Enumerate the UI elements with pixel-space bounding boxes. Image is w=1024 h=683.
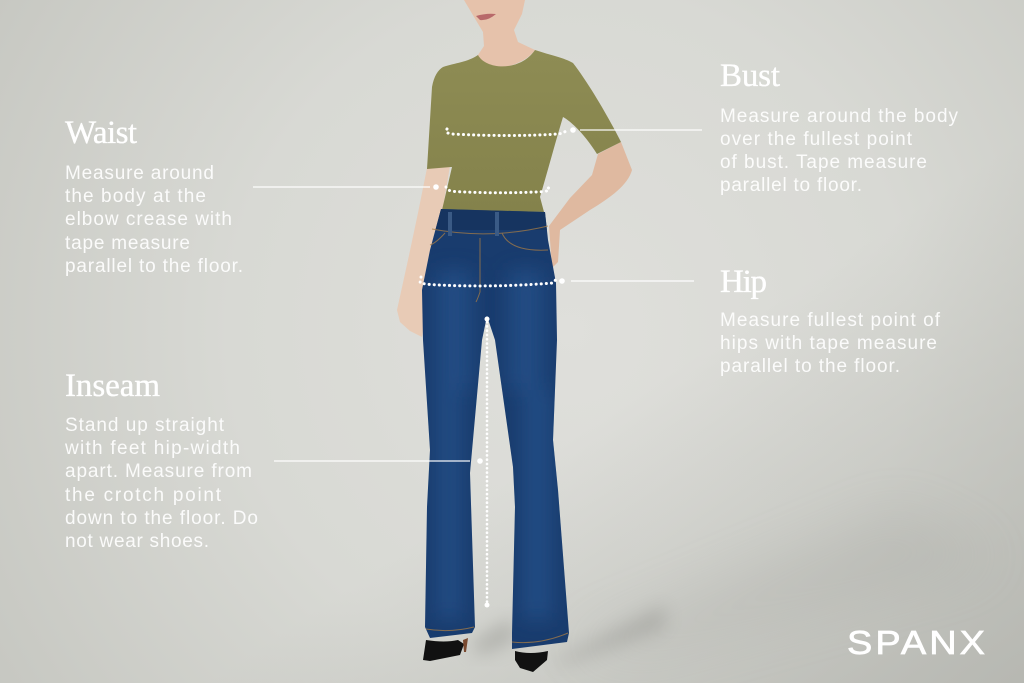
inseam text: Stand up straight: [65, 415, 225, 436]
left shoe: [423, 640, 464, 661]
hip text: Measure fullest point of: [720, 310, 941, 331]
left arm: [397, 166, 450, 337]
waist heading: Waist: [65, 115, 137, 151]
bust heading: Bust: [720, 58, 780, 94]
jeans: [422, 209, 569, 649]
jeans highlights: [436, 270, 552, 620]
lips: [476, 14, 496, 20]
model figure: [397, 0, 632, 672]
right shoe: [515, 651, 548, 672]
waist text: parallel to the floor.: [65, 256, 243, 277]
right arm and hand: [549, 142, 632, 268]
SPANX logo: SPANX: [847, 624, 985, 661]
callout lines: [253, 130, 702, 461]
bust text: over the fullest point: [720, 129, 913, 150]
floor shadows: [470, 510, 1000, 665]
bust text: [720, 106, 958, 196]
waist text: Measure around: [65, 163, 214, 184]
bust text: Measure around the body: [720, 106, 958, 127]
inseam block: [64, 368, 258, 552]
bust text: parallel to floor.: [720, 175, 862, 196]
shirt: [427, 50, 621, 212]
waist text: elbow crease with: [65, 209, 232, 230]
inseam text: not wear shoes.: [65, 531, 209, 552]
hip block: [720, 264, 941, 377]
bust text: of bust. Tape measure: [720, 152, 927, 173]
hip text: parallel to the floor.: [720, 356, 900, 377]
inseam text: the crotch point: [65, 485, 222, 506]
bust measuring dots: [446, 128, 568, 136]
skin: face and neck: [464, 0, 535, 68]
inseam text: with feet hip-width: [64, 438, 240, 459]
jeans belt loops: [448, 212, 499, 236]
waist measuring dots: [446, 187, 549, 193]
inseam text: down to the floor. Do: [65, 508, 258, 529]
heel: [463, 638, 468, 652]
inseam text: apart. Measure from: [65, 461, 252, 482]
hip heading: Hip: [720, 264, 767, 300]
inseam heading: Inseam: [65, 368, 160, 404]
hip text: hips with tape measure: [720, 333, 937, 354]
hip measuring dots: [420, 277, 558, 286]
jeans seams: [426, 226, 568, 643]
waist block: [65, 115, 243, 277]
hip text: [720, 310, 941, 377]
inseam text: [64, 415, 258, 552]
waist text: tape measure: [65, 233, 190, 254]
jeans waist shading: [436, 209, 547, 230]
callout markers: [433, 127, 576, 607]
waist text: the body at the: [65, 186, 206, 207]
inseam measuring dots: [486, 322, 488, 602]
waist text: [65, 163, 243, 277]
bust block: [720, 58, 958, 196]
